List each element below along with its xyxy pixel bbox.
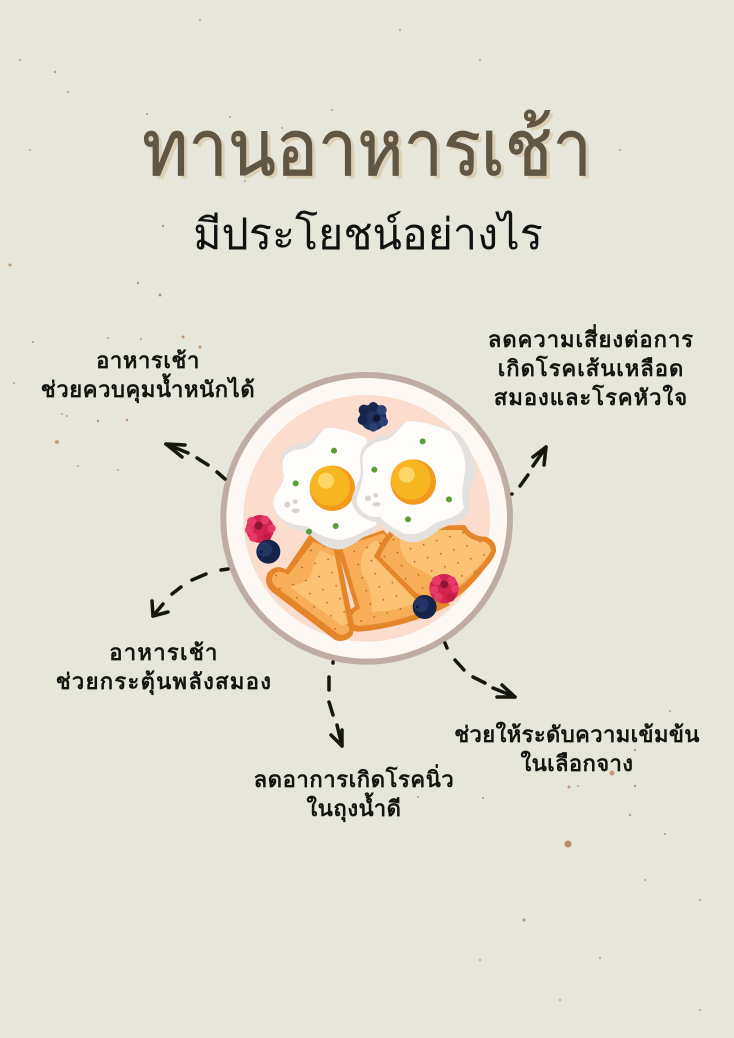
label: weight control: อาหารเช้า <box>96 348 200 373</box>
fried egg right <box>352 421 475 542</box>
title: ทานอาหารเช้า <box>142 104 592 192</box>
label: weight control <box>41 348 255 404</box>
label: stroke and heart disease: สมองและโรคหัวใจ <box>494 385 688 410</box>
label: gallstones <box>254 764 454 822</box>
parsley flecks <box>293 438 452 535</box>
left toast <box>266 535 354 641</box>
label: blood concentration: ในเลือกจาง <box>521 751 633 776</box>
label: brain power <box>56 640 272 696</box>
blackberry <box>358 402 388 432</box>
label: gallstones: ในถุงน้ำดี <box>306 796 402 821</box>
arrow: lower left <box>152 569 228 616</box>
blueberry right <box>413 595 437 619</box>
label: blood concentration: ช่วยให้ระดับความเข้มข้น <box>454 722 700 747</box>
label: stroke and heart disease <box>488 324 694 410</box>
raspberry right <box>429 574 459 603</box>
label: weight control: ช่วยควบคุมน้ำหนักได้ <box>41 377 255 402</box>
blueberry left <box>256 540 280 564</box>
fried egg left <box>273 428 385 549</box>
right toast <box>374 525 496 606</box>
arrow: down <box>329 662 342 746</box>
arrow: lower right <box>445 643 515 697</box>
subtitle: มีประโยชน์อย่างไร <box>193 211 543 259</box>
label: brain power: อาหารเช้า <box>109 640 219 665</box>
middle toast <box>337 530 450 632</box>
plate <box>223 375 510 662</box>
raspberry left <box>245 515 276 543</box>
label: stroke and heart disease: ลดความเสี่ยงต่อการ <box>488 327 694 352</box>
arrow: upper left <box>166 444 225 479</box>
label: brain power: ช่วยกระตุ้นพลังสมอง <box>56 669 272 694</box>
label: gallstones: ลดอาการเกิดโรคนิ่ว <box>254 767 454 792</box>
arrow: upper right <box>512 447 546 494</box>
label: stroke and heart disease: เกิดโรคเส้นเหลือด <box>498 356 684 381</box>
label: blood concentration <box>454 722 700 776</box>
